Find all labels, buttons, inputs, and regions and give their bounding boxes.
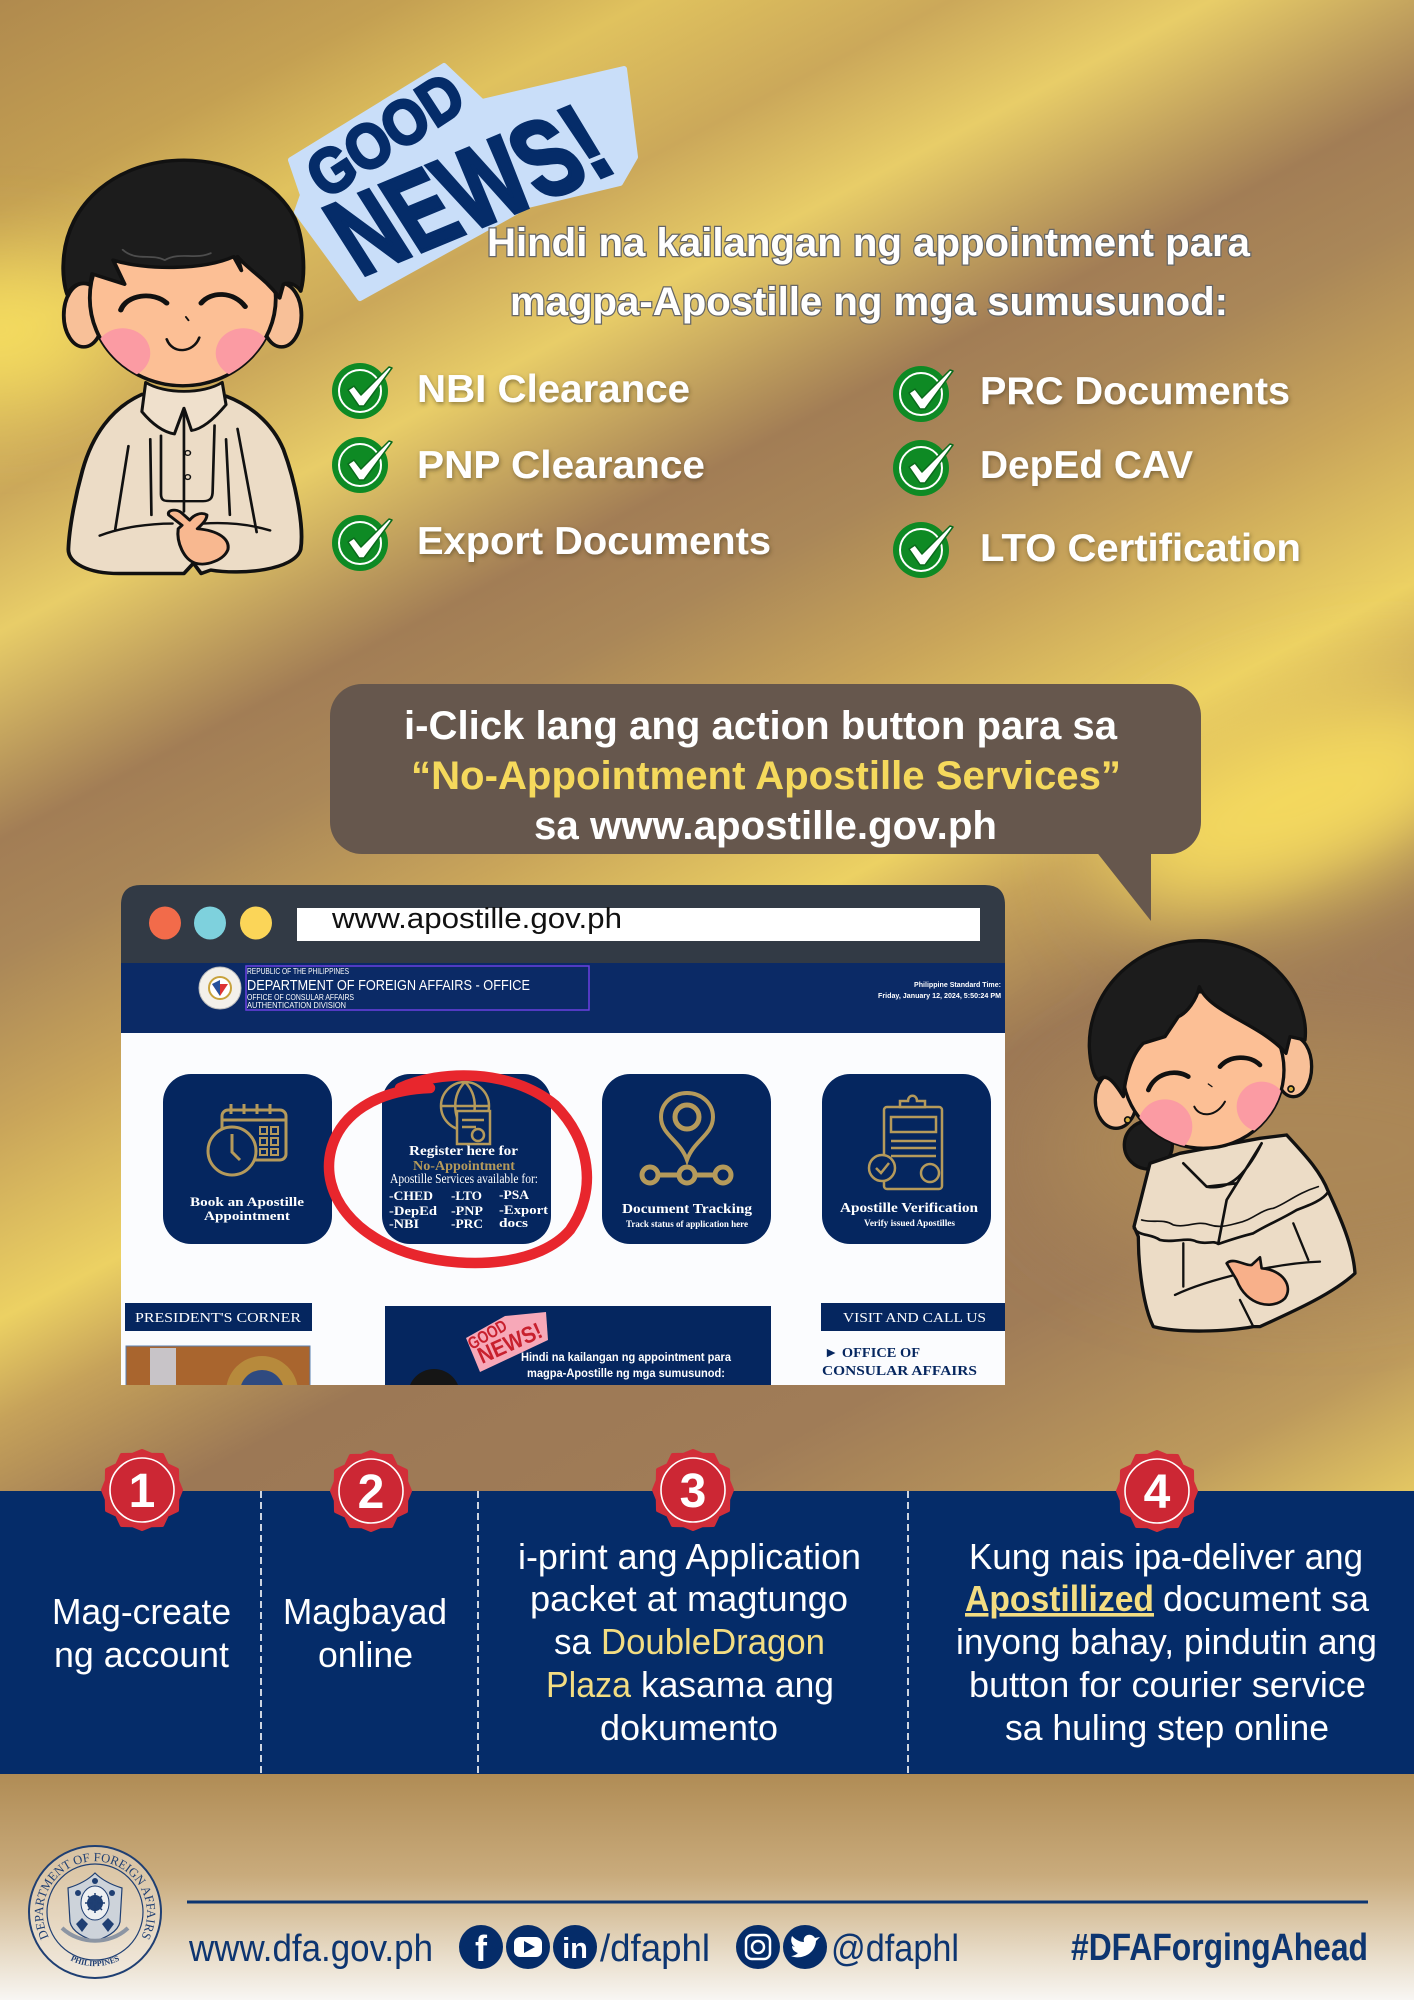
- browser window: [121, 885, 1005, 1428]
- card: no-appointment registration: -PNP: [451, 1203, 483, 1218]
- step 4: document sa: [1163, 1578, 1370, 1619]
- step 3: [518, 1451, 861, 1748]
- background highlight: [0, 270, 1414, 1270]
- news banner: Hindi na kailangan ng appointment para: [521, 1350, 731, 1364]
- news banner: NEWS!: [473, 1317, 546, 1369]
- card: no-appointment registration: Apostille Services available for:: [390, 1172, 538, 1187]
- visit and call us: VISIT AND CALL US: [843, 1311, 986, 1326]
- step 4: Kung nais ipa-deliver ang: [969, 1536, 1363, 1577]
- president's corner: PRESIDENT'S CORNER: [135, 1311, 302, 1326]
- browser chrome: www.apostille.gov.ph: [331, 903, 622, 935]
- website header: REPUBLIC OF THE PHILIPPINES: [247, 967, 349, 976]
- website header: OFFICE OF CONSULAR AFFAIRS: [247, 992, 354, 1002]
- NEWS lettering: NEWS!: [305, 83, 633, 297]
- speech bubble: sa www.apostille.gov.ph: [534, 804, 997, 848]
- step 1: [52, 1451, 231, 1675]
- card: document tracking: Document Tracking: [622, 1201, 752, 1216]
- list labels: PRC Documents: [980, 370, 1290, 413]
- check list of documents: [332, 363, 1301, 578]
- visit and call us: [821, 1303, 1005, 1379]
- card: no-appointment registration: -Export: [499, 1202, 549, 1217]
- social icons: facebook youtube linkedin: f: [475, 1928, 488, 1969]
- step 3: i-print ang Application: [518, 1536, 861, 1577]
- step 1: ng account: [54, 1634, 229, 1675]
- card: no-appointment registration: -PRC: [451, 1216, 483, 1231]
- list labels: DepEd CAV: [980, 444, 1193, 487]
- card: no-appointment registration: -CHED: [389, 1188, 433, 1203]
- steps band: [0, 1451, 1414, 1774]
- card: book an appointment: Book an Apostille: [190, 1194, 304, 1209]
- step 3: kasama ang: [641, 1664, 834, 1705]
- good news sticker: [291, 59, 635, 298]
- social icons: instagram twitter: [736, 1925, 827, 1969]
- list labels: NBI Clearance: [417, 368, 690, 411]
- card: no-appointment registration: Register here for: [409, 1144, 518, 1159]
- card: no-appointment registration: docs: [499, 1215, 528, 1230]
- DFA seal: [28, 1845, 162, 1979]
- headline: [487, 221, 1251, 324]
- website header: AUTHENTICATION DIVISION: [247, 1000, 346, 1010]
- social icons: facebook youtube linkedin: [459, 1925, 597, 1969]
- character: boy in barong: [63, 160, 303, 573]
- step 3: DoubleDragon: [601, 1621, 825, 1662]
- card: document tracking: [602, 1074, 771, 1244]
- card: no-appointment registration: No-Appointment: [413, 1159, 515, 1174]
- step 4: 4: [1144, 1466, 1171, 1519]
- icon: green checks: [332, 363, 953, 578]
- card: book an appointment: Appointment: [204, 1208, 291, 1223]
- social icons: facebook youtube linkedin: in: [562, 1933, 588, 1965]
- DFA seal: DEPARTMENT OF FOREIGN AFFAIRS: [34, 1852, 156, 1940]
- DFA seal: PHILIPPINES: [70, 1955, 119, 1966]
- speech bubble: [330, 684, 1201, 921]
- card: book an appointment: [163, 1074, 332, 1244]
- website header: DEPARTMENT OF FOREIGN AFFAIRS - OFFICE: [247, 977, 530, 994]
- card: apostille verification: [822, 1074, 991, 1244]
- news banner: GOOD: [464, 1316, 510, 1353]
- card: document tracking: Track status of application here: [626, 1219, 748, 1229]
- step 2: Magbayad: [283, 1591, 447, 1632]
- red hand-drawn circle: [329, 1075, 587, 1263]
- step 4: Apostillized: [965, 1578, 1154, 1619]
- news banner: magpa-Apostille ng mga sumusunod:: [527, 1366, 725, 1380]
- facebook handle: /dfaphl: [600, 1928, 710, 1970]
- website header: Philippine Standard Time:: [914, 980, 1001, 989]
- step 1: Mag-create: [52, 1591, 231, 1632]
- card: apostille verification: Verify issued Apostilles: [864, 1218, 956, 1228]
- GOOD lettering: GOOD: [295, 59, 477, 212]
- president's corner: [125, 1303, 312, 1385]
- card: no-appointment registration: -LTO: [451, 1188, 482, 1203]
- step 3: packet at magtungo: [530, 1578, 848, 1619]
- headline: magpa-Apostille ng mga sumusunod:: [510, 280, 1228, 324]
- step 3: 3: [680, 1465, 706, 1518]
- card: no-appointment registration: -PSA: [499, 1187, 530, 1202]
- step 2: 2: [358, 1466, 384, 1519]
- visit and call us: ► OFFICE OF: [824, 1346, 920, 1361]
- step 1: 1: [129, 1465, 155, 1518]
- card: no-appointment registration: [382, 1074, 551, 1244]
- news banner: [385, 1306, 771, 1385]
- website page: [121, 963, 1005, 1428]
- step 3: sa: [554, 1621, 592, 1662]
- browser chrome: [121, 885, 1005, 963]
- website header: Friday, January 12, 2024, 5:50:24 PM: [878, 991, 1001, 1000]
- card: no-appointment registration: -NBI: [389, 1216, 419, 1231]
- step 3: dokumento: [600, 1707, 778, 1748]
- headline: Hindi na kailangan ng appointment para: [487, 221, 1251, 265]
- step 2: [283, 1452, 447, 1675]
- step 4: button for courier service: [969, 1664, 1366, 1705]
- step 4: [956, 1452, 1377, 1748]
- character: girl in filipiniana: [1089, 941, 1355, 1331]
- social handle: @dfaphl: [831, 1928, 959, 1970]
- footer: [0, 1774, 1414, 2000]
- step 3: Plaza: [546, 1664, 632, 1705]
- speech bubble: i-Click lang ang action button para sa: [404, 704, 1118, 748]
- step 4: sa huling step online: [1005, 1707, 1329, 1748]
- card: apostille verification: Apostille Verification: [840, 1200, 979, 1215]
- card: no-appointment registration: -DepEd: [389, 1203, 438, 1218]
- list labels: PNP Clearance: [417, 444, 705, 487]
- step 2: online: [318, 1634, 413, 1675]
- list labels: LTO Certification: [980, 527, 1301, 570]
- visit and call us: CONSULAR AFFAIRS: [822, 1364, 977, 1379]
- step 4: inyong bahay, pindutin ang: [956, 1621, 1377, 1662]
- list labels: [417, 368, 1301, 570]
- speech bubble: “No-Appointment Apostille Services”: [411, 754, 1121, 798]
- website url: www.dfa.gov.ph: [188, 1928, 433, 1970]
- website header: [121, 963, 1005, 1033]
- list labels: Export Documents: [417, 520, 771, 563]
